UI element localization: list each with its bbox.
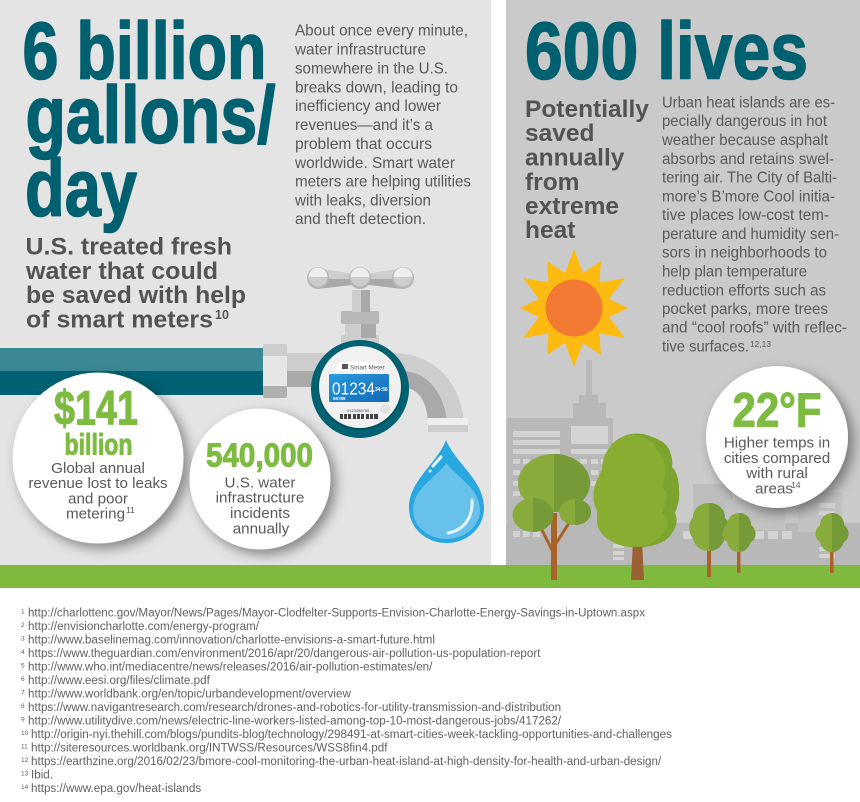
ground (0, 565, 860, 588)
callout: 141 billion: metering (66, 506, 125, 522)
footnotes: 5 (21, 662, 25, 669)
footnotes: 7 (21, 689, 25, 696)
footnotes: http://charlottenc.gov/Mayor/News/Pages/Mayor-Clodfelter-Supports-Envision-Charlotte-Energy-Savings-in-Uptown.aspx (28, 606, 645, 620)
callout: 22F: with rural (745, 465, 808, 482)
body text: urban heat islands: Urban heat islands are es- (662, 94, 835, 111)
callout: 141 billion (12, 372, 184, 544)
subheading: treated fresh water: be saved with help (26, 282, 246, 309)
footnotes: 4 (21, 649, 25, 656)
callout: 540,000 incidents: 540,000 (206, 436, 313, 474)
footnotes: 1 (21, 608, 25, 615)
subheading: treated fresh water: 10 (215, 308, 229, 322)
tree: large (594, 434, 679, 580)
body text: water infrastructure: with leaks, diversion (294, 192, 431, 209)
subheading: treated fresh water: water that could (25, 258, 218, 285)
subheading: potentially saved: annually (525, 144, 625, 172)
footnotes: https://www.epa.gov/heat-islands (31, 782, 201, 795)
subheading: potentially saved: extreme (525, 193, 619, 220)
callout: 22F: 22°F (732, 384, 822, 438)
body text: urban heat islands: and “cool roofs” with reflec- (662, 320, 847, 337)
body text: urban heat islands: pocket parks, more trees (662, 301, 828, 318)
footnotes: https://www.theguardian.com/environment/2016/apr/20/dangerous-air-pollution-us-population-report (28, 647, 541, 660)
body text: water infrastructure: breaks down, leading to (295, 79, 458, 96)
footnotes: 8 (21, 703, 25, 710)
body text: urban heat islands: 12,13 (750, 339, 771, 349)
tree: small middle (722, 513, 756, 573)
body text: urban heat islands: tive surfaces. (662, 339, 749, 356)
footnotes: 3 (21, 635, 25, 642)
callout: 540,000 incidents: incidents (230, 505, 290, 522)
body text: urban heat islands: help plan temperature (662, 264, 807, 281)
footnotes: 2 (21, 622, 25, 629)
icon: smart meter: 34:56 (375, 387, 388, 393)
footnotes: https://earthzine.org/2016/02/23/bmore-cool-monitoring-the-urban-heat-island-at-high-density-for-health-and-urban-design/ (31, 755, 662, 768)
subheading: treated fresh water: U.S. treated fresh (26, 234, 232, 260)
body text: water infrastructure: About once every minute, (295, 23, 468, 40)
headline: 6 billion gallons/day: gallons/ (26, 70, 276, 160)
body text: urban heat islands: tering air. The City of Balti- (662, 170, 837, 187)
subheading: potentially saved (525, 96, 649, 244)
callout: 22F: cities compared (724, 450, 830, 467)
footnotes: 9 (21, 716, 25, 723)
body text: urban heat islands: pecially dangerous in hot (662, 113, 828, 130)
body text: urban heat islands: more’s B’more Cool initia- (662, 188, 835, 205)
body text: water infrastructure: somewhere in the U.S. (295, 60, 448, 77)
subheading: potentially saved: saved (525, 120, 594, 147)
footnotes: http://envisioncharlotte.com/energy-program/ (28, 620, 260, 633)
body text: urban heat islands: tive places low-cost tem- (662, 207, 829, 224)
teal water pipe (0, 348, 265, 395)
footnotes: http://www.worldbank.org/en/topic/urbandevelopment/overview (28, 688, 351, 700)
callout: 22F: 14 (791, 480, 801, 490)
body text: water infrastructure: and theft detection. (295, 211, 426, 228)
icon: smart meter (311, 340, 409, 438)
footnotes: http://siteresources.worldbank.org/INTWSS/Resources/WSS8fin4.pdf (31, 742, 388, 754)
body text: urban heat islands: weather because asphalt (661, 132, 829, 149)
footnotes: http://www.baselinemag.com/innovation/charlotte-envisions-a-smart-future.html (28, 634, 435, 646)
body text: urban heat islands: reduction efforts such as (662, 282, 826, 299)
callout: 22F: areas (755, 480, 793, 498)
footnotes: http://www.utilitydive.com/news/electric-line-workers-listed-among-top-10-most-dangerous-jobs/417262/ (28, 714, 562, 728)
footnotes: 10 (21, 730, 29, 737)
subheading: treated fresh water (25, 234, 246, 334)
callout: 22F (706, 366, 848, 508)
callout: 141 billion: $141 (54, 382, 138, 436)
icon: faucet (263, 267, 468, 432)
icon: smart meter: 55789 (333, 396, 346, 401)
callout: 540,000 incidents: annually (233, 520, 290, 538)
callout: 141 billion: Global annual (51, 460, 145, 477)
icon: smart meter: 01234 (332, 378, 375, 398)
callout: 540,000 incidents: infrastructure (216, 490, 304, 506)
body text: urban heat islands: perature and humidity sen- (662, 226, 839, 243)
subheading: potentially saved: heat (525, 217, 575, 244)
body text: water infrastructure (294, 23, 471, 228)
footnotes: 6 (21, 676, 25, 683)
icon: sun (520, 249, 628, 367)
headline: 6 billion gallons/day (22, 6, 276, 234)
body text: water infrastructure: water infrastructure (294, 42, 426, 58)
footnotes: Ibid. (31, 768, 53, 782)
footnotes: https://www.navigantresearch.com/research/drones-and-robotics-for-utility-transmission-and-distribution (28, 701, 561, 714)
panel: heat background (506, 0, 860, 566)
subheading: potentially saved: Potentially (525, 96, 649, 123)
body text: water infrastructure: problem that occurs (295, 136, 432, 153)
footnotes: 11 (21, 743, 28, 750)
callout: 540,000 incidents (190, 408, 330, 550)
icon: smart meter: 0123456789 (347, 408, 370, 413)
callout: 141 billion: and poor (68, 490, 128, 508)
footnotes: http://origin-nyi.thehill.com/blogs/pundits-blog/technology/298491-at-smart-cities-week-tackling-opportunities-and-challenges (31, 728, 672, 741)
panel: water background (0, 0, 491, 566)
callout: 141 billion: billion (64, 428, 132, 462)
subheading: potentially saved: from (525, 169, 579, 196)
tree: branching (512, 454, 591, 580)
body text: water infrastructure: revenues—and it’s a (295, 117, 434, 134)
callout: 22F: Higher temps in (724, 434, 830, 452)
body text: urban heat islands (661, 94, 847, 356)
tree: small right (816, 513, 848, 573)
icon: water drop (409, 440, 484, 543)
headline: 600 lives: 600 lives (525, 6, 808, 96)
city skyline (506, 360, 860, 568)
subheading: treated fresh water: of smart meters (26, 306, 213, 334)
callout: 141 billion: 11 (126, 505, 135, 515)
body text: urban heat islands: absorbs and retains swel- (662, 151, 834, 168)
footnotes: 12 (21, 757, 29, 764)
tree: small left (689, 503, 730, 577)
footnotes: http://www.who.int/mediacentre/news/releases/2016/air-pollution-estimates/en/ (28, 660, 433, 674)
body text: water infrastructure: meters are helping utilities (295, 174, 471, 191)
footnotes: 14 (21, 784, 29, 791)
footnotes: 13 (21, 770, 29, 777)
callout: 540,000 incidents: U.S. water (225, 474, 295, 492)
headline: 6 billion gallons/day: day (25, 144, 137, 234)
icon: smart meter: Smart Meter (350, 364, 385, 372)
footnotes (21, 606, 672, 795)
headline: 6 billion gallons/day: 6 billion (22, 6, 266, 96)
footnotes: http://www.eesi.org/files/climate.pdf (28, 674, 211, 687)
body text: water infrastructure: inefficiency and lower (295, 98, 441, 115)
body text: water infrastructure: worldwide. Smart water (294, 155, 455, 172)
body text: urban heat islands: sors in neighborhoods to (662, 245, 827, 262)
callout: 141 billion: revenue lost to leaks (28, 475, 168, 492)
